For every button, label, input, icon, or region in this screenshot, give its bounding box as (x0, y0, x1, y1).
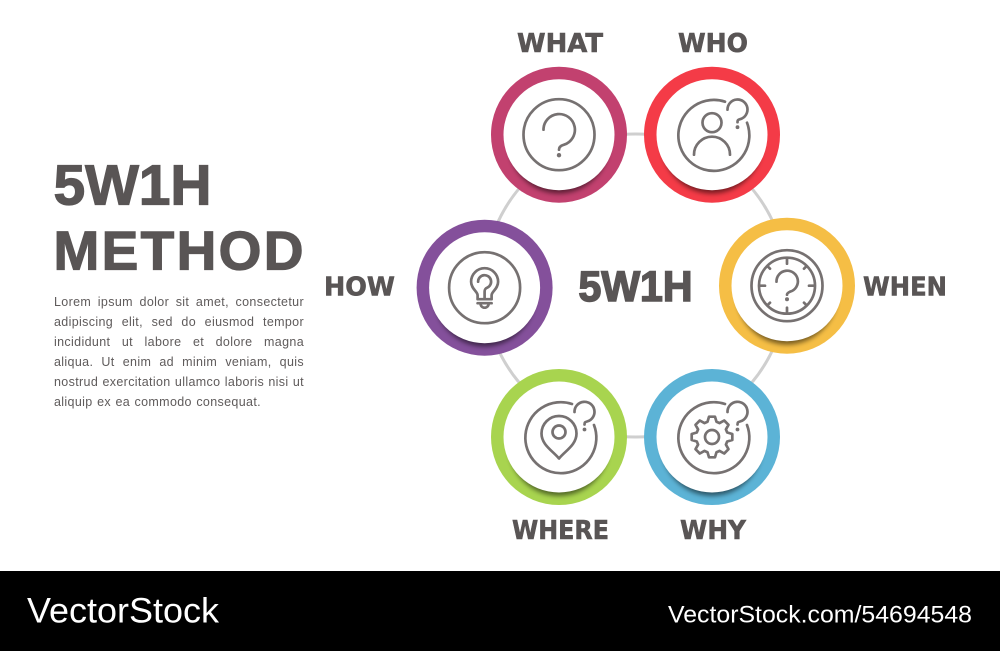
connecting ring (484, 134, 787, 437)
icon: question mark (524, 99, 594, 170)
label: WHO: WHO (678, 29, 748, 59)
icon: light bulb (449, 252, 520, 323)
node: WHO (644, 67, 780, 203)
title: 5W1H: 5W1H (54, 154, 212, 218)
body text: adipiscing elit, sed do eiusmod tempor (54, 315, 304, 329)
footer URL: VectorStock.com/54694548 (668, 602, 972, 628)
node: WHERE (491, 369, 627, 505)
footer bar (0, 571, 1000, 651)
body text (54, 295, 304, 409)
node: WHEN (719, 218, 855, 354)
label: HOW: HOW (324, 272, 395, 302)
label: WHEN: WHEN (863, 272, 947, 302)
title: METHOD: METHOD (54, 220, 304, 282)
node: WHY (644, 369, 780, 505)
body text: aliqua. Ut enim ad minim veniam, quis (54, 355, 304, 369)
icon: person with question mark (678, 100, 749, 171)
body text: Lorem ipsum dolor sit amet, consectetur (54, 295, 304, 309)
node: HOW (417, 220, 553, 356)
body text: aliquip ex ea commodo consequat. (54, 395, 261, 409)
label: WHERE: WHERE (512, 516, 609, 546)
center label: 5W1H: 5W1H (578, 263, 692, 311)
icon: clock with question mark (752, 250, 822, 321)
node: WHAT (491, 67, 627, 203)
body text: incididunt ut labore et dolore magna (54, 335, 304, 349)
body text: nostrud exercitation ullamco laboris nisi ut (54, 375, 304, 389)
footer brand: VectorStock (27, 592, 220, 630)
icon: gear with question mark (678, 402, 749, 473)
icon: map pin with question mark (525, 402, 596, 473)
label: WHAT: WHAT (517, 29, 603, 59)
label: WHY: WHY (680, 516, 747, 546)
